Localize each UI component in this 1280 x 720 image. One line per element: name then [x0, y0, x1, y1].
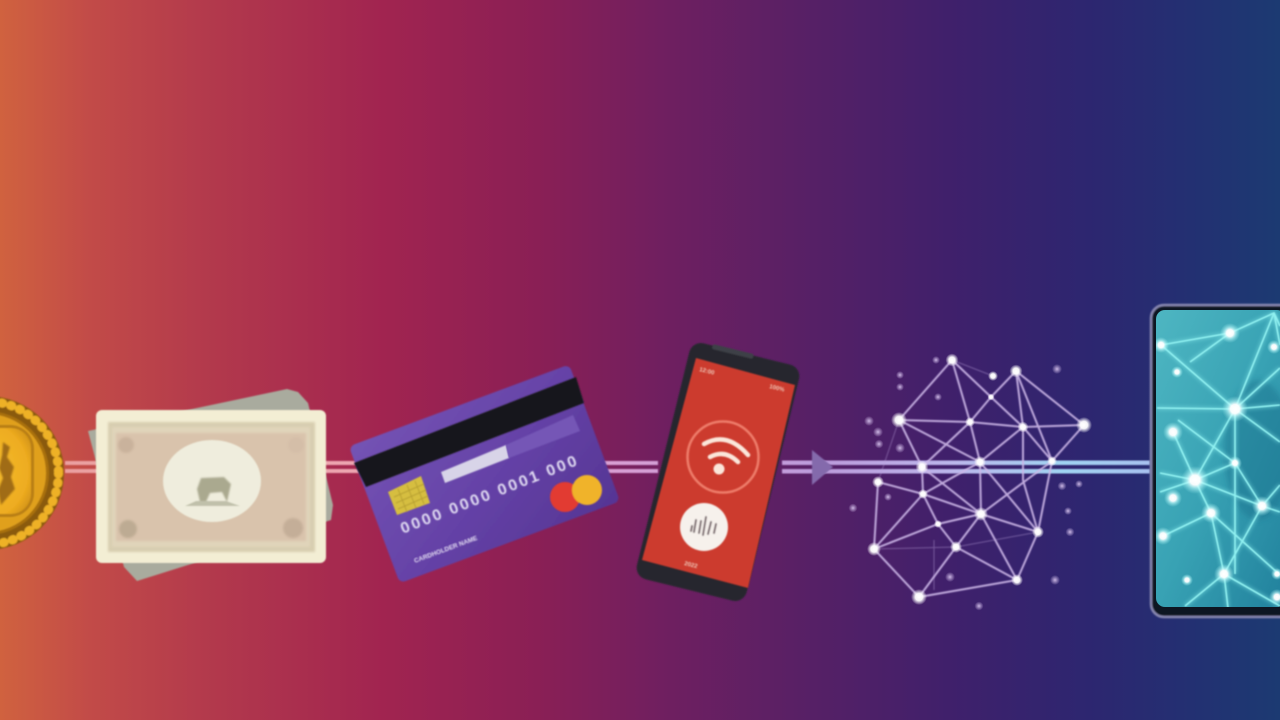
icon: banknotes: [88, 389, 333, 581]
screen nodes: [1153, 323, 1280, 605]
icon: smartphone with contactless payment: [634, 341, 802, 603]
icon: credit card: [349, 364, 620, 583]
card lighter strip: [506, 415, 580, 458]
tablet screen: [1153, 310, 1280, 608]
card magnetic stripe: [354, 377, 584, 487]
screen network lines: [1157, 313, 1280, 608]
icon: tablet with AI network screen: [1151, 305, 1280, 617]
phone status text: [684, 367, 786, 570]
network links: [874, 360, 1084, 597]
icon: gold coin: [0, 396, 64, 550]
phone screen: [642, 358, 795, 588]
faint network links: [874, 360, 1038, 590]
timeline rail: double line connecting the stages: [65, 460, 1150, 474]
network graph: digital currency: [848, 354, 1092, 610]
wifi symbol in ring: [688, 422, 758, 492]
network nodes: [867, 354, 1092, 605]
phone status text: 12:00: [699, 367, 716, 377]
scattered dots around network: [848, 356, 1083, 610]
banknote oval vignette: [163, 440, 261, 522]
card number: 0000 0000 0001 000: [398, 453, 579, 538]
phone status text: 2022: [684, 561, 699, 570]
tablet frame: [1151, 305, 1280, 617]
arrow on the timeline: [812, 450, 833, 485]
card network logo: [550, 475, 602, 512]
front banknote: [96, 410, 326, 563]
phone status text: 100%: [769, 384, 786, 394]
cardholder name: CARDHOLDER NAME: [413, 535, 479, 565]
card signature panel: [441, 445, 509, 483]
card chip: [388, 476, 430, 515]
sound wave button: [680, 503, 728, 551]
back banknote: [88, 389, 333, 581]
